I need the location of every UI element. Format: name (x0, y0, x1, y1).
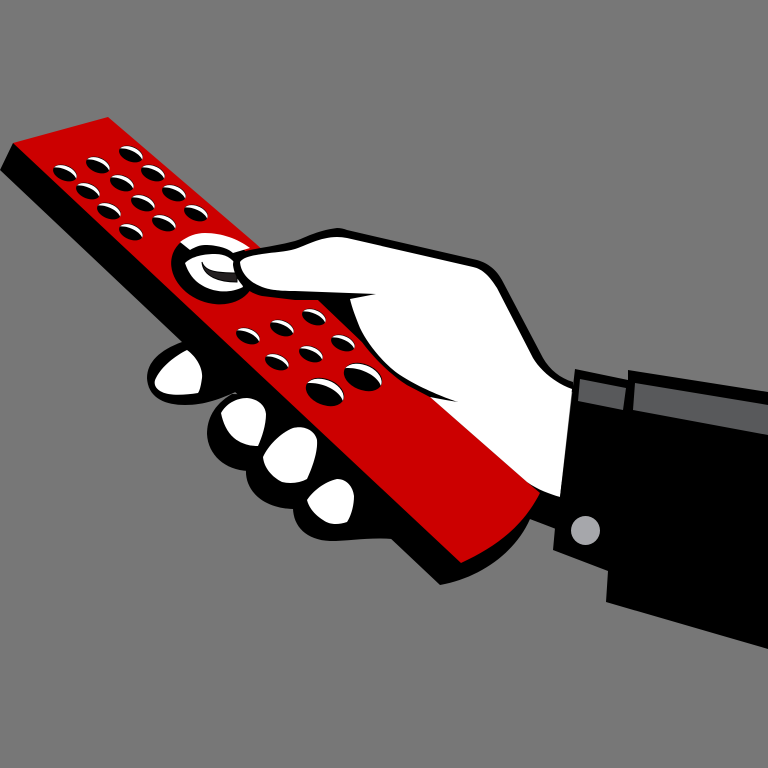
button (51, 161, 79, 185)
button (297, 342, 325, 366)
sleeve button (571, 516, 600, 545)
large button (302, 372, 348, 412)
button (108, 171, 136, 195)
dial black base (160, 221, 266, 317)
button (84, 153, 112, 177)
finger outline 4 (293, 470, 420, 541)
button (139, 161, 167, 185)
button (329, 331, 357, 355)
remote control side shadow (0, 143, 570, 585)
button (234, 324, 262, 348)
nail 2 (221, 398, 266, 446)
shirt cuff band (578, 379, 626, 410)
large button (340, 357, 386, 397)
button (300, 305, 328, 329)
button (182, 201, 210, 225)
finger nails (155, 350, 354, 524)
button (160, 181, 188, 205)
finger outline 2 (207, 394, 300, 471)
button (129, 191, 157, 215)
hand white fill (240, 237, 572, 497)
keypad upper buttons (51, 142, 210, 244)
jacket cuff band (633, 383, 768, 435)
button (74, 179, 102, 203)
nail 3 (263, 427, 317, 483)
nail 4 (307, 479, 354, 524)
navigation dial (160, 221, 266, 317)
dial inner white ring and centre (185, 254, 243, 291)
button (95, 199, 123, 223)
nail 1 (155, 350, 202, 395)
shirt and jacket sleeve (530, 369, 768, 649)
dial dark crescent (202, 262, 237, 282)
button (117, 220, 145, 244)
button (268, 316, 296, 340)
button (263, 350, 291, 374)
dial outer white arc (180, 233, 250, 253)
button (117, 142, 145, 166)
keypad lower buttons (234, 305, 386, 412)
hand black outline (233, 228, 573, 397)
remote control red face (13, 117, 540, 563)
button (150, 211, 178, 235)
finger outline 1 (147, 342, 260, 405)
fingers: black outlines (147, 342, 420, 541)
finger outline 3 (246, 430, 345, 509)
